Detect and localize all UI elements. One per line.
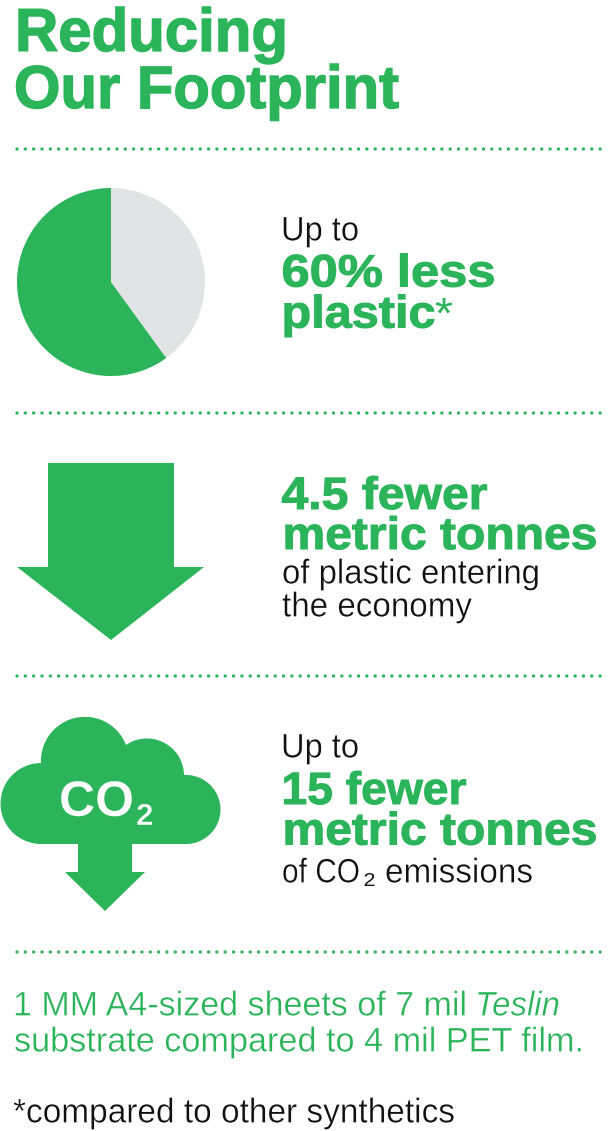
- icon: CO2 cloud with down arrow: [0, 717, 220, 911]
- icon: CO2 cloud with down arrow: CO: [59, 771, 134, 827]
- text: up to 60% less plastic: [281, 210, 496, 338]
- text: up to 60% less plastic: plastic: [282, 286, 436, 338]
- text: up to 15 fewer metric tonnes: of CO: [282, 852, 360, 890]
- icon: CO2 cloud with down arrow: 2: [136, 797, 154, 832]
- text: up to 15 fewer metric tonnes: 2: [364, 870, 376, 890]
- text: up to 15 fewer metric tonnes: emissions: [385, 852, 533, 890]
- text: 4.5 fewer metric tonnes: metric tonnes: [282, 508, 598, 559]
- text: 4.5 fewer metric tonnes: [282, 468, 598, 624]
- text: 4.5 fewer metric tonnes: the economy: [282, 586, 472, 624]
- text: up to 15 fewer metric tonnes: [281, 728, 598, 890]
- text: 4.5 fewer metric tonnes: 4.5 fewer: [282, 468, 488, 519]
- footnote: sheet comparison: 1 MM A4-sized sheets of 7 mil: [13, 986, 467, 1024]
- text: up to 15 fewer metric tonnes: 15 fewer: [282, 763, 466, 814]
- footnote: sheet comparison: Teslin: [475, 986, 560, 1024]
- icon: large down arrow: [17, 463, 204, 640]
- footnote: sheet comparison: substrate compared to 4 mil PET film.: [14, 1022, 584, 1060]
- footnote: sheet comparison: [13, 986, 584, 1060]
- text: up to 60% less plastic: Up to: [281, 210, 359, 248]
- pie chart: 60% less plastic: [17, 188, 205, 376]
- text: 4.5 fewer metric tonnes: of plastic entering: [282, 554, 540, 592]
- text: up to 60% less plastic: *: [435, 289, 453, 338]
- text: up to 60% less plastic: 60% less: [282, 246, 496, 296]
- footnote: compared to other synthetics: *compared to other synthetics: [13, 1093, 455, 1131]
- text: up to 15 fewer metric tonnes: metric tonnes: [282, 804, 598, 854]
- title: [14, 0, 399, 121]
- text: up to 15 fewer metric tonnes: Up to: [281, 728, 359, 766]
- title: Our Footprint: [14, 54, 399, 121]
